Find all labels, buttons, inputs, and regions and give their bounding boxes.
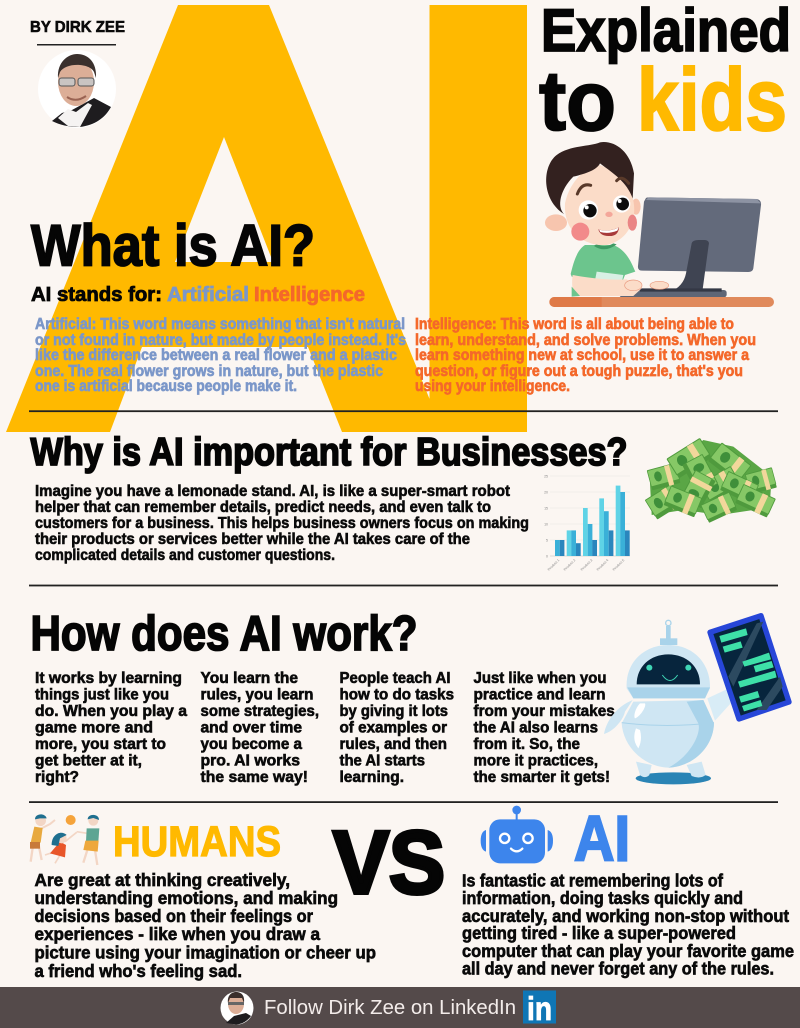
subheading: AI stands for: <box>31 284 162 306</box>
panel: why AI matters for business <box>30 431 777 572</box>
heading: how does AI work: How does AI work? <box>30 607 418 661</box>
text: artificial definition: one. The real flower grows in nature, but the plastic <box>35 363 383 380</box>
text: lemonade stand: Imagine you have a lemonade stand. AI, is like a super-smart robot <box>35 483 511 500</box>
text column 2: the same way! <box>200 769 308 786</box>
heading: humans: HUMANS <box>113 818 281 866</box>
text column 2 <box>200 670 319 786</box>
text: lemonade stand <box>35 483 529 564</box>
text: humans description: Are great at thinking creatively, <box>34 870 290 890</box>
byline: BY DIRK ZEE <box>30 19 125 36</box>
subheading: Artificial <box>167 284 249 306</box>
footer bar <box>0 987 800 1028</box>
text column 3: the AI starts <box>340 752 425 770</box>
text column 1: do. When you play a <box>35 703 187 720</box>
panel: humans <box>30 814 376 981</box>
illustration: boy at computer <box>545 142 774 307</box>
bar chart: Product 2 <box>563 558 576 572</box>
text column 1: more, you start to <box>35 736 166 753</box>
icon: robot head <box>481 806 553 863</box>
text column 2: and over time <box>200 720 302 736</box>
text column 1: game more and <box>35 720 153 736</box>
heading: what is AI: What is AI? <box>31 214 315 278</box>
footer text: Follow Dirk Zee on LinkedIn <box>264 997 516 1019</box>
text: intelligence definition <box>415 316 756 395</box>
bar chart: Product 1 <box>547 558 560 572</box>
panel: how AI works <box>30 607 789 786</box>
title <box>539 0 791 149</box>
text column 4: practice and learn <box>474 686 606 704</box>
subheading: Intelligence <box>254 284 365 306</box>
text column 2: rules, you learn <box>200 686 314 704</box>
text: humans description: understanding emotions, and making <box>34 888 338 908</box>
bar chart: 10 <box>544 522 548 526</box>
bar chart <box>544 474 630 572</box>
bar chart: 5 <box>546 538 548 542</box>
text: lemonade stand: helper that can remember details, predict needs, and even talk to <box>35 499 491 516</box>
footer portrait <box>220 992 254 1024</box>
text: humans description <box>34 870 376 981</box>
text: artificial definition <box>35 316 406 395</box>
text: humans description: decisions based on their feelings or <box>34 906 313 926</box>
text column 3: of examples or <box>340 720 447 736</box>
text column 2: some strategies, <box>200 703 319 720</box>
text column 3: by giving it lots <box>340 703 448 720</box>
text: AI description: accurately, and working non-stop without <box>462 906 789 926</box>
text column 4: more it practices, <box>474 752 598 770</box>
title: to <box>539 54 616 148</box>
text column 1: It works by learning <box>35 670 182 687</box>
text: artificial definition: Artificial: This word means something that isn't natural <box>35 316 405 333</box>
text column 2: you become a <box>200 736 302 753</box>
text column 4: Just like when you <box>474 670 606 687</box>
icon: LinkedIn: in <box>527 990 552 1027</box>
heading: why important: Why is AI important for Businesses? <box>30 431 628 474</box>
subheading <box>31 284 365 306</box>
illustration: children playing <box>30 814 99 865</box>
text column 1: get better at it, <box>35 752 142 770</box>
bar chart: Product 5 <box>612 558 625 572</box>
text: lemonade stand: complicated details and customer questions. <box>35 547 335 564</box>
text column 1 <box>35 670 187 786</box>
icon: pile of money <box>645 439 777 523</box>
text column 4: the smarter it gets! <box>474 769 610 786</box>
text: intelligence definition: question, or figure out a tough puzzle, that's you <box>415 363 743 380</box>
text: intelligence definition: learn, understand, and solve problems. When you <box>415 332 756 349</box>
text: humans description: picture using your imagination or cheer up <box>34 942 376 962</box>
text column 3: rules, and then <box>340 736 447 753</box>
text: AI description: getting tired - like a super-powered <box>462 923 736 943</box>
text: humans description: a friend who's feeling sad. <box>34 961 242 981</box>
text column 4: from your mistakes, <box>474 703 619 720</box>
panel: AI <box>462 802 794 978</box>
text: AI description <box>462 870 794 978</box>
text: lemonade stand: customers for a business. This helps business owners focus on making <box>35 515 529 532</box>
big yellow letters AI <box>6 5 527 432</box>
text column 4 <box>474 670 619 786</box>
text column 1: right? <box>35 769 79 786</box>
text column 2: pro. AI works <box>200 752 300 770</box>
text column 3: learning. <box>340 769 404 786</box>
text column 4: from it. So, the <box>474 736 580 753</box>
bar chart: 25 <box>544 474 548 478</box>
versus label: VS <box>333 812 445 912</box>
author portrait <box>38 50 116 128</box>
text column 4: the AI also learns <box>474 720 598 736</box>
text: AI description: information, doing tasks quickly and <box>462 888 743 908</box>
heading: AI: AI <box>574 802 630 874</box>
text: AI description: Is fantastic at remembering lots of <box>462 870 723 890</box>
text column 3 <box>340 670 454 786</box>
panel: what is AI <box>31 214 756 395</box>
bar chart: Product 4 <box>596 558 609 572</box>
bar chart: Product 3 <box>580 558 593 572</box>
text: artificial definition: one is artificial because people make it. <box>35 378 297 395</box>
text: lemonade stand: their products or services better while the AI takes care of the <box>35 531 470 548</box>
text: artificial definition: or not found in nature, but made by people instead. It's <box>35 332 406 349</box>
illustration: robot with tablet <box>604 616 789 784</box>
text column 3: how to do tasks <box>340 686 454 704</box>
text: intelligence definition: Intelligence: This word is all about being able to <box>415 316 734 333</box>
text: intelligence definition: using your intelligence. <box>415 378 570 395</box>
bar chart: 0 <box>546 554 548 558</box>
bar chart: 15 <box>544 506 548 510</box>
text: intelligence definition: learn something new at school, use it to answer a <box>415 347 749 364</box>
text column 2: You learn the <box>200 670 298 687</box>
text: artificial definition: like the difference between a real flower and a plastic <box>35 347 397 364</box>
text: humans description: experiences - like when you draw a <box>34 924 320 944</box>
text column 1: things just like you <box>35 686 169 704</box>
text column 3: People teach AI <box>340 670 450 687</box>
bar chart: 20 <box>544 490 548 494</box>
text: AI description: all day and never forget any of the rules. <box>462 958 774 978</box>
